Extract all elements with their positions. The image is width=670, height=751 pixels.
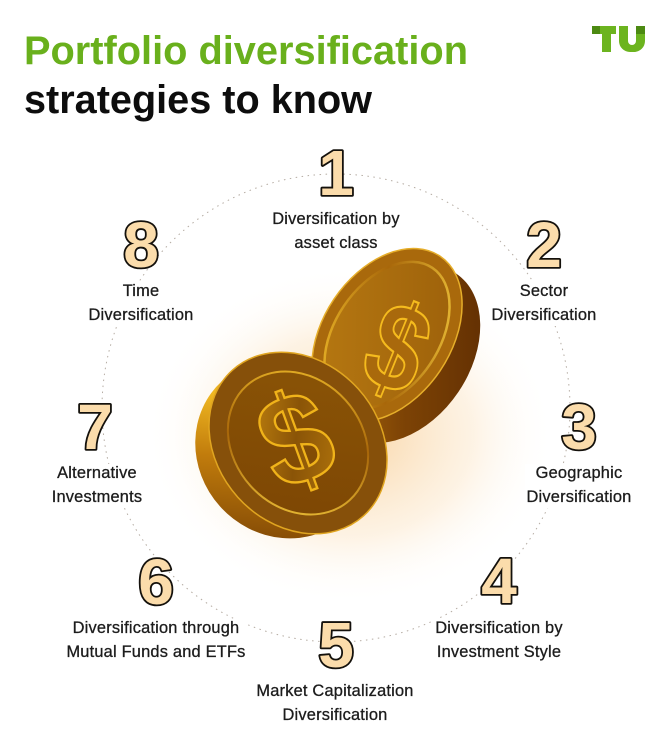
- item 2: [491, 209, 597, 324]
- item 8: [88, 209, 194, 324]
- back coin edge: [291, 236, 513, 472]
- item 1: [272, 137, 400, 252]
- item 5: Diversification: [282, 706, 388, 724]
- item 1: Diversification by: [272, 210, 400, 228]
- back coin: [281, 220, 513, 472]
- item 3: [526, 391, 632, 506]
- item 4: Investment Style: [437, 643, 561, 661]
- item 6: [66, 546, 246, 661]
- dotted circle: [102, 174, 570, 642]
- item 2: Sector: [520, 282, 569, 300]
- item 3: Diversification: [526, 488, 632, 506]
- item 1: 1: [318, 137, 354, 209]
- item 2: 2: [526, 209, 562, 281]
- item 6: Diversification through: [73, 619, 239, 637]
- back coin ring: [299, 239, 475, 431]
- item 4: [435, 545, 563, 661]
- title: strategies to know: [24, 78, 373, 122]
- glow behind coins: [145, 265, 555, 605]
- title: [24, 29, 468, 122]
- item 5: 5: [318, 609, 354, 681]
- item 8: Diversification: [88, 306, 194, 324]
- item 6: Mutual Funds and ETFs: [66, 643, 246, 661]
- item 7: Alternative: [57, 464, 137, 482]
- title: Portfolio diversification: [24, 29, 468, 73]
- front coin: [159, 316, 424, 575]
- item 4: Diversification by: [435, 619, 563, 637]
- item 5: Market Capitalization: [256, 682, 414, 700]
- item 2: Diversification: [491, 306, 597, 324]
- front coin edge: [159, 323, 409, 575]
- front coin ring: [199, 343, 397, 543]
- item 6: 6: [138, 546, 174, 618]
- item 8: 8: [123, 209, 159, 281]
- item 7: 7: [77, 391, 113, 463]
- item 1: asset class: [294, 234, 378, 252]
- item 5: [256, 609, 414, 724]
- item 3: 3: [561, 391, 597, 463]
- front coin dollar: $: [240, 361, 352, 518]
- logo: [592, 26, 645, 52]
- item 7: [52, 391, 142, 506]
- front coin face: [172, 316, 424, 570]
- item 4: 4: [481, 545, 517, 617]
- back coin dollar: $: [346, 273, 449, 422]
- item 8: Time: [123, 282, 159, 300]
- back coin face: [281, 220, 493, 450]
- item 3: Geographic: [536, 464, 622, 482]
- item 7: Investments: [52, 488, 142, 506]
